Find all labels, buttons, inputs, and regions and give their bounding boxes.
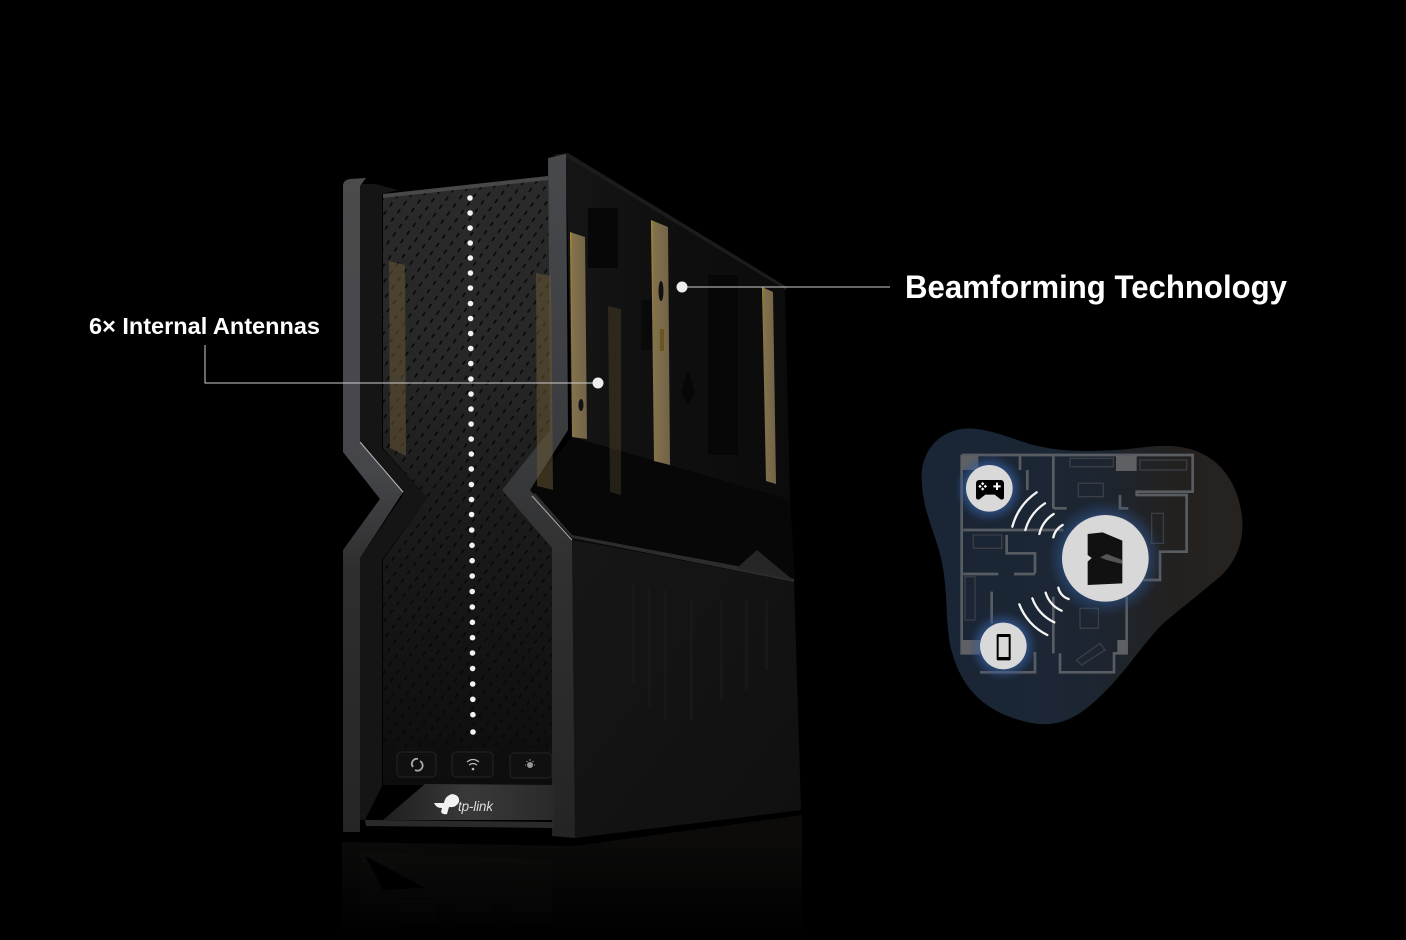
side interior shapes	[588, 208, 738, 455]
tp-link logo: tp-link	[458, 799, 494, 814]
signal arcs to phone	[1019, 588, 1069, 635]
bottom lip	[365, 820, 554, 828]
coverage blob	[922, 428, 1242, 724]
button: LED	[510, 753, 552, 778]
panel top edge	[383, 176, 548, 198]
upper transparent side	[566, 154, 790, 500]
inner left frame band	[360, 184, 427, 820]
lower side body	[572, 539, 801, 838]
button: sync	[397, 752, 436, 777]
marker dot	[676, 282, 688, 292]
floor plan	[962, 455, 1193, 672]
beamforming diagram	[922, 428, 1242, 724]
button: wifi	[452, 752, 493, 777]
gamepad node	[966, 465, 1013, 512]
gold antenna 3	[762, 287, 776, 484]
signal arcs to gamepad	[1012, 492, 1063, 537]
left frame bar	[343, 178, 403, 832]
wedge notch	[737, 550, 793, 580]
transparent top rim	[552, 153, 787, 290]
right frame column	[502, 154, 575, 838]
gold antenna 2	[651, 220, 670, 465]
floor plan corner blocks	[962, 456, 1137, 654]
floor plan furniture	[965, 458, 1187, 665]
faded rear antennas	[389, 261, 621, 495]
leader line	[682, 286, 890, 288]
phone node	[980, 623, 1027, 669]
heading: Beamforming Technology	[905, 269, 1287, 305]
tp-link logo	[434, 794, 494, 814]
heading: 6× Internal Antennas	[89, 313, 320, 339]
router reflection	[340, 815, 805, 940]
marker dot	[592, 378, 604, 388]
wedge ridge	[533, 493, 794, 582]
gold antenna 1	[570, 232, 587, 439]
callout: 6x Internal Antennas	[89, 313, 604, 388]
perforation pattern	[383, 178, 552, 748]
perforated front panel	[383, 178, 552, 785]
dark wedge	[530, 437, 795, 580]
left frame highlight	[360, 442, 403, 492]
LED dots	[467, 195, 476, 735]
glows	[954, 453, 1164, 681]
right frame highlight	[532, 496, 572, 540]
side vents	[632, 584, 768, 720]
antenna slots	[578, 281, 664, 411]
router node	[1062, 515, 1149, 602]
callout: Beamforming Technology	[676, 269, 1287, 305]
leader line	[205, 345, 598, 383]
router	[343, 153, 801, 838]
logo plate	[383, 784, 554, 820]
